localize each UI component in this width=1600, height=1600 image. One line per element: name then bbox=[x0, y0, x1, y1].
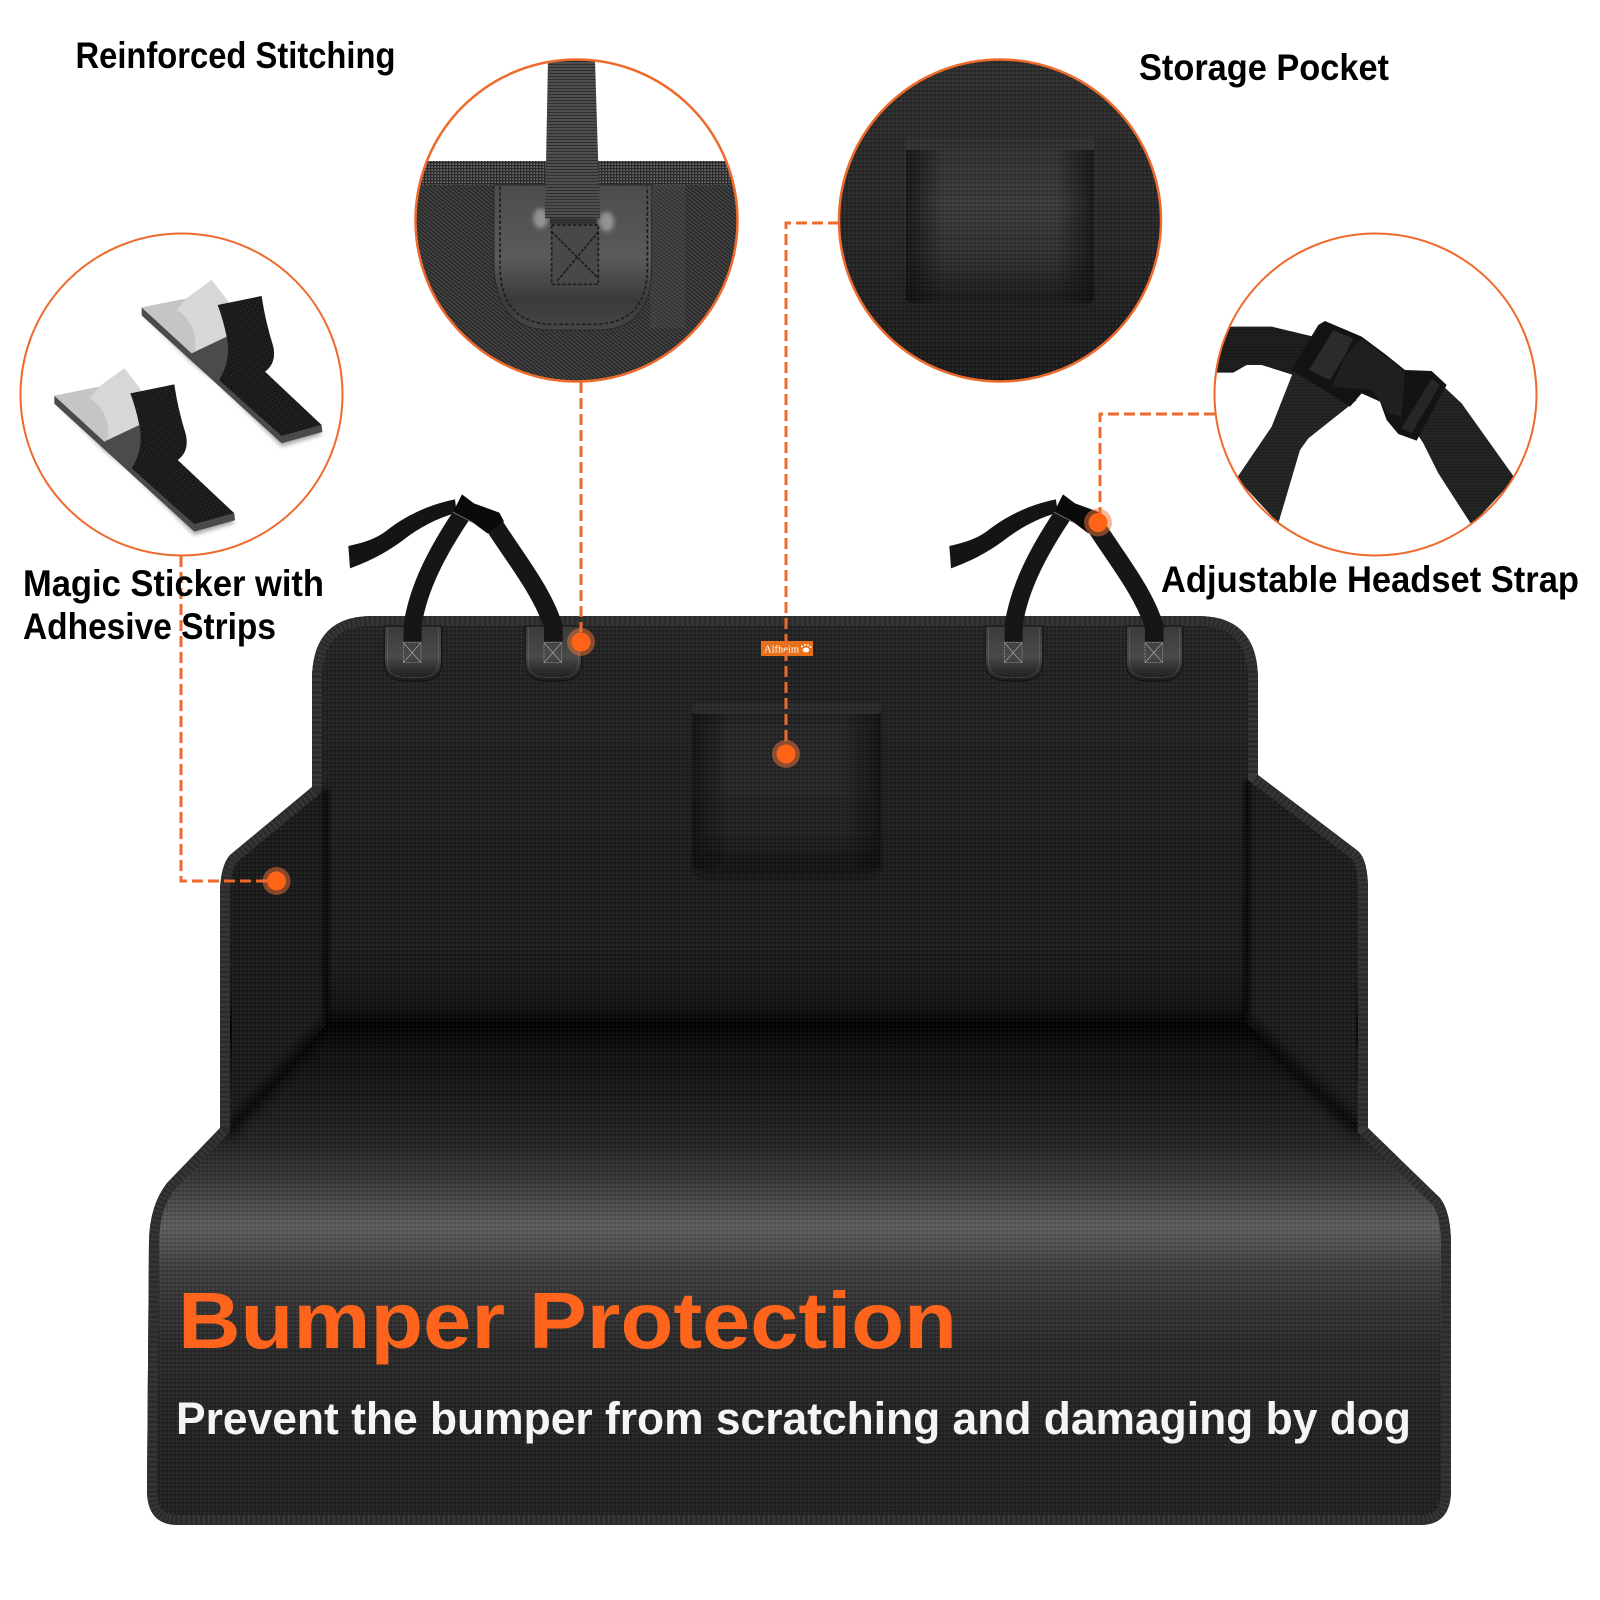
label: reinforced stitching: Reinforced Stitching bbox=[76, 35, 396, 76]
brand tag bbox=[761, 641, 813, 656]
label: magic sticker: Adhesive Strips bbox=[23, 606, 276, 647]
product: bumper-protection seat cover bbox=[140, 610, 1460, 1530]
marker dot: pocket bbox=[772, 740, 800, 768]
leader line: storage pocket bbox=[786, 223, 839, 745]
cover body bbox=[147, 616, 1451, 1525]
subheading: Prevent the bumper from scratching and damaging by dog bbox=[176, 1393, 1411, 1444]
pocket close-up bbox=[906, 138, 1094, 303]
label: magic sticker bbox=[23, 563, 324, 647]
label: magic sticker: Magic Sticker with bbox=[23, 563, 324, 604]
right headrest strap bbox=[949, 494, 1183, 681]
left headrest strap bbox=[348, 494, 582, 681]
label: storage pocket: Storage Pocket bbox=[1139, 47, 1389, 88]
circle: reinforced stitching bbox=[410, 60, 750, 395]
circle: adjustable headset strap buckle bbox=[1212, 234, 1536, 556]
leader line: headset strap bbox=[1100, 414, 1215, 515]
storage pocket on cover bbox=[692, 703, 881, 877]
circle: storage pocket bbox=[839, 59, 1161, 382]
icon: velcro strip rear bbox=[142, 280, 322, 447]
icon: velcro strip front bbox=[54, 368, 235, 535]
label: adjustable headset strap: Adjustable Headset Strap bbox=[1161, 559, 1579, 600]
marker dot: sticker bbox=[262, 867, 290, 895]
heading: bumper protection: Bumper Protection bbox=[178, 1276, 957, 1365]
brand tag: Alfheim bbox=[764, 644, 799, 656]
circle: magic sticker strips bbox=[20, 234, 342, 556]
leader line: magic sticker bbox=[181, 556, 270, 881]
marker dot: stitching bbox=[567, 628, 595, 656]
marker dot: strap bbox=[1084, 508, 1112, 536]
leader line: reinforced stitching bbox=[580, 382, 582, 632]
